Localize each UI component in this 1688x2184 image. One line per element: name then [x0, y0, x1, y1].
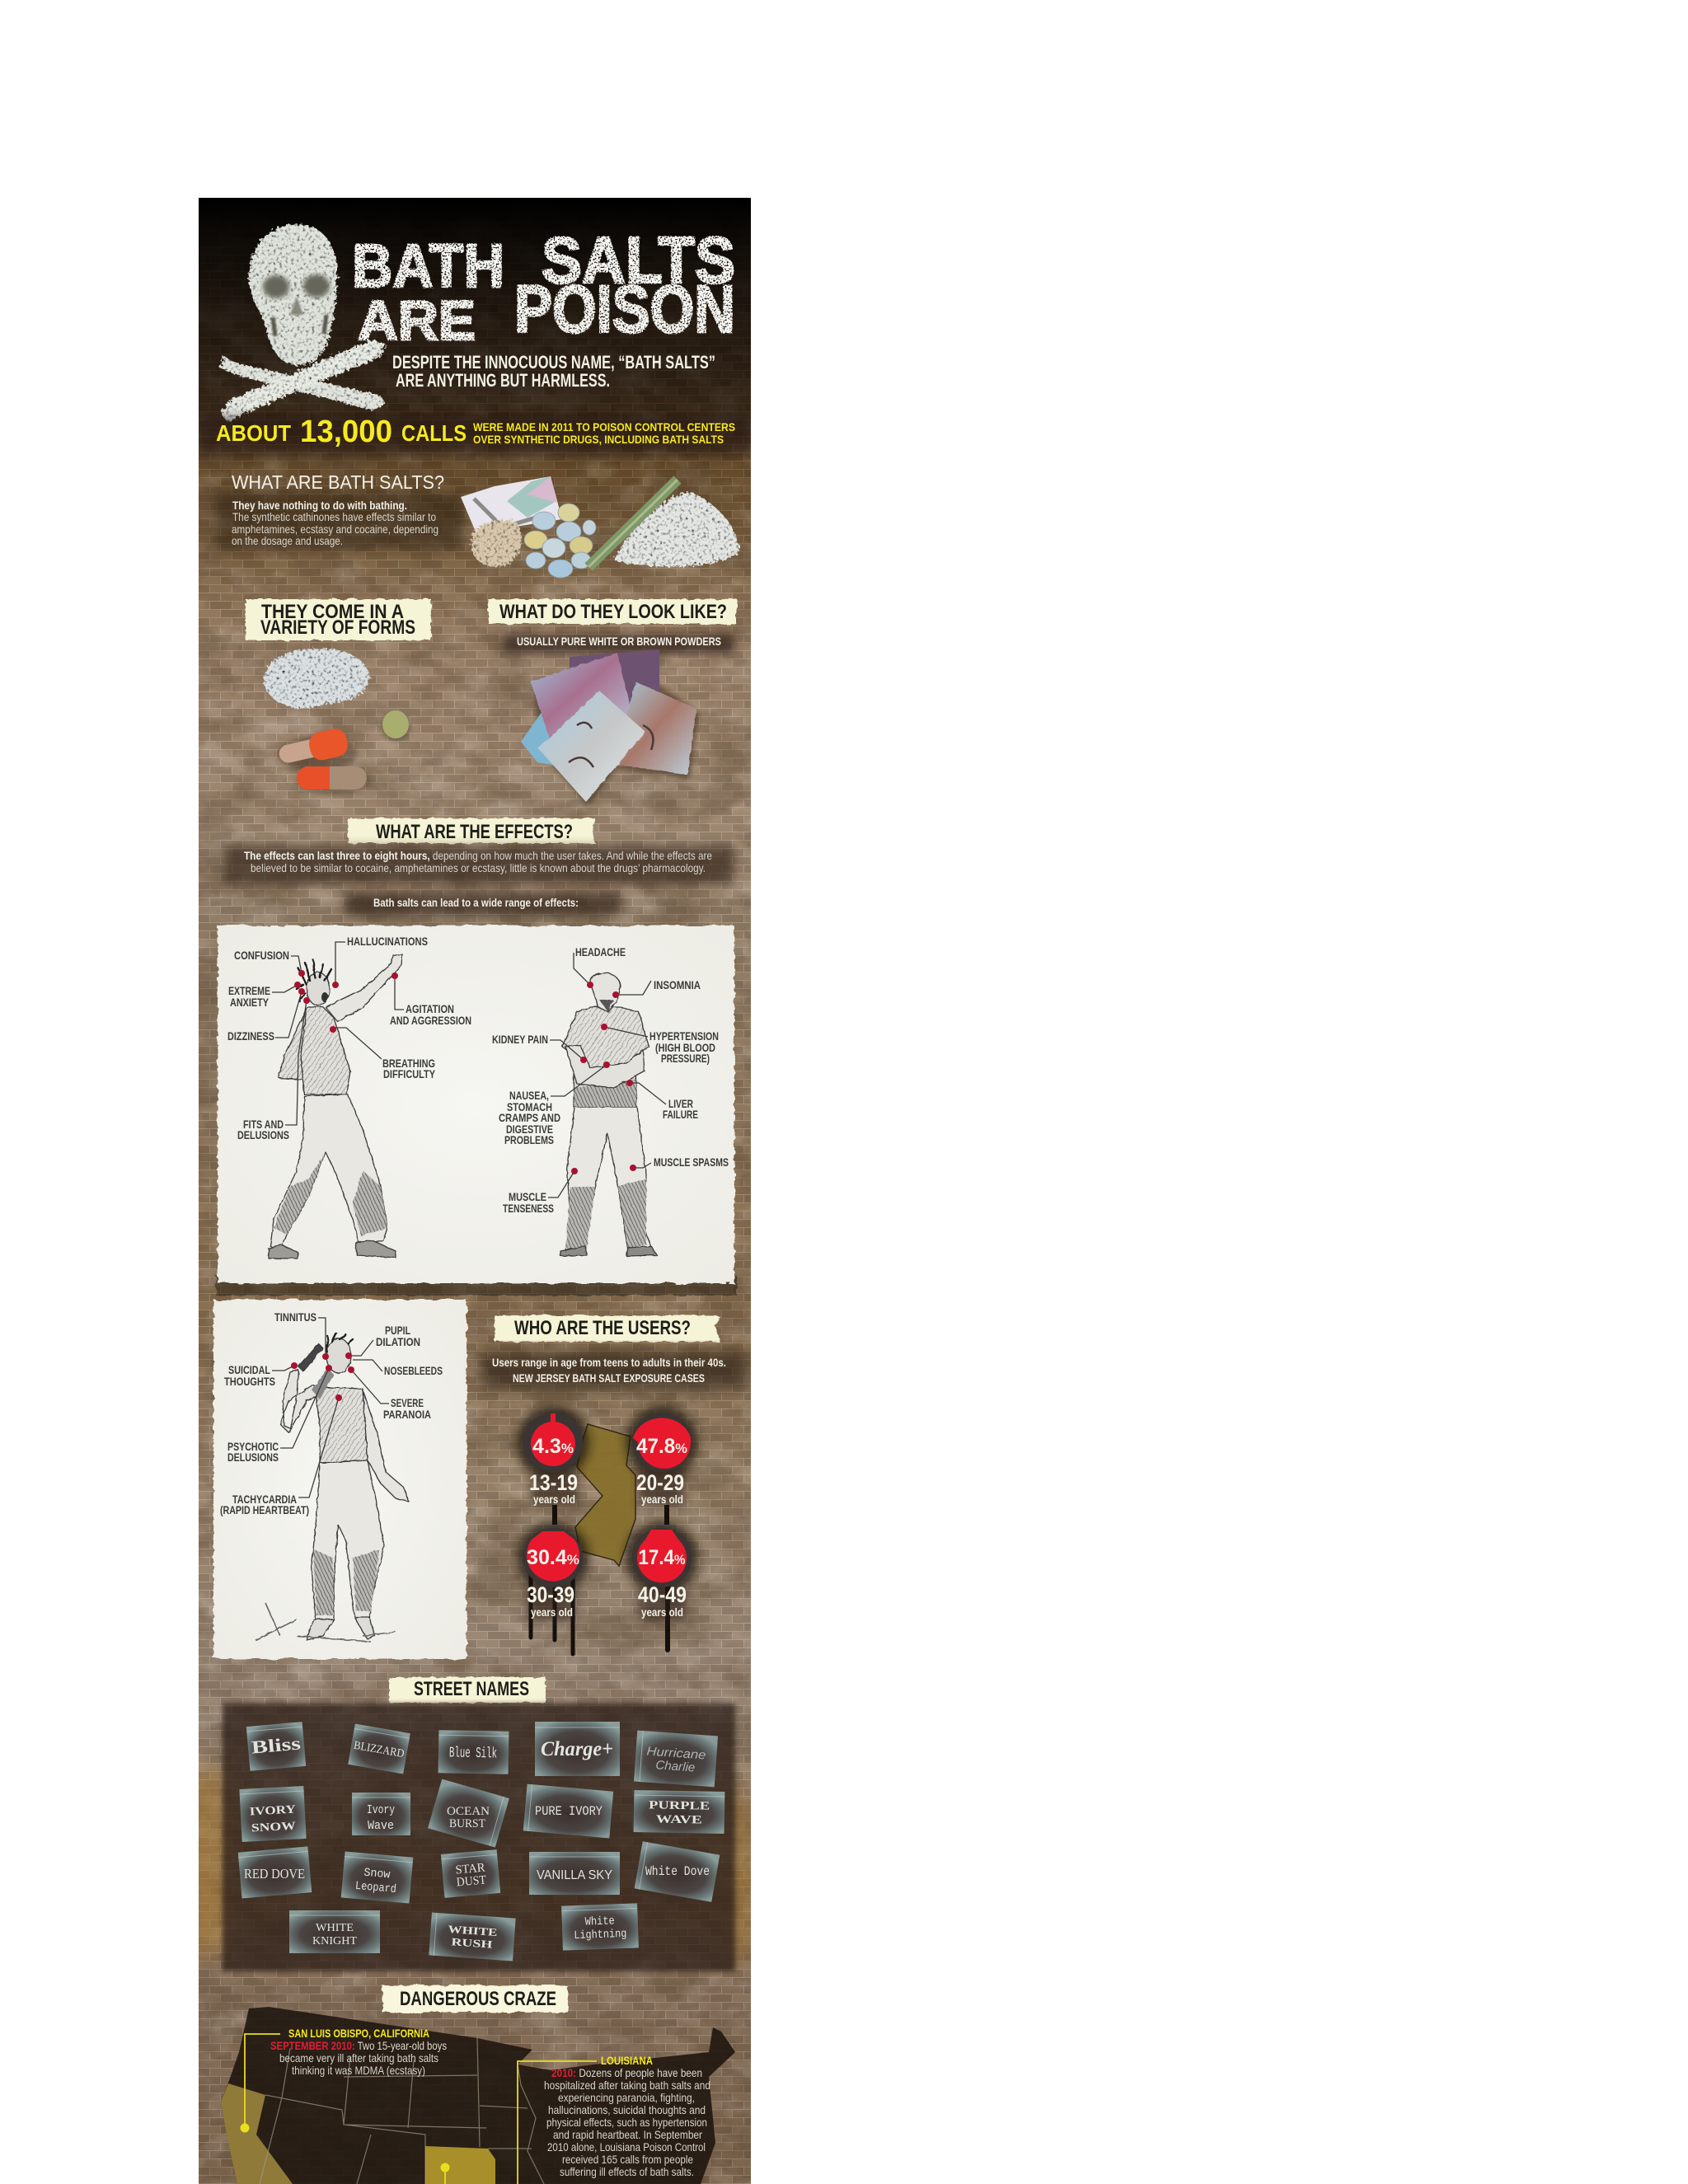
effect labels: third figure: (RAPID HEARTBEAT): [220, 1503, 309, 1516]
heading: street names: [389, 1677, 546, 1703]
effect labels: right figure: TENSENESS: [503, 1202, 554, 1215]
heading: dangerous craze: [382, 1985, 568, 2013]
bag: Ivory Snow: [239, 1786, 307, 1842]
callout: louisiana: suffering ill effects of bath salts.: [560, 2165, 694, 2178]
heading: what do they look like: WHAT DO THEY LOOK LIKE?: [499, 601, 727, 623]
effect labels: left figure: DIZZINESS: [227, 1029, 274, 1043]
heading: they come in a variety of forms: THEY COME IN A: [261, 601, 404, 623]
effect labels: right figure: PROBLEMS: [504, 1133, 554, 1146]
bag: Hurricane Charlie: Charlie: [655, 1758, 696, 1775]
effect labels: right figure: CRAMPS AND: [499, 1111, 560, 1124]
bag: Red Dove: [238, 1846, 312, 1899]
text block: what are bath salts: The synthetic cathinones have effects similar to: [232, 510, 436, 523]
text block: what are bath salts: [216, 471, 463, 550]
text block: what are bath salts: They have nothing to do with bathing.: [232, 499, 407, 512]
effect labels: left figure: BREATHING: [382, 1057, 435, 1070]
callout: san luis obispo: [241, 2027, 447, 2133]
bag: Ivory Wave: [352, 1793, 410, 1835]
icon: drugs, pills, note and powder: [461, 476, 739, 578]
effect labels: third figure: DELUSIONS: [227, 1451, 279, 1464]
bag: Blizzard: [348, 1723, 410, 1774]
effect labels: third figure: PSYCHOTIC: [227, 1440, 279, 1453]
callout: louisiana: hallucinations, suicidal thoughts and: [548, 2103, 706, 2116]
heading: they come in a variety of forms: [246, 599, 431, 640]
effect labels: left figure: DIFFICULTY: [383, 1067, 436, 1080]
icon: capsules: [276, 727, 371, 794]
brick wall background: [185, 198, 758, 2184]
icon: white crystal: [264, 649, 369, 708]
title: BATH: [352, 232, 504, 300]
effect labels: right figure: HEADACHE: [575, 945, 626, 958]
effect labels: right figure: [492, 945, 729, 1215]
callout: louisiana: 2010 alone, Louisiana Poison Control: [547, 2140, 706, 2154]
bag: Blue Silk: Blue Silk: [449, 1745, 497, 1763]
bag: Snow Leopard: Snow: [363, 1867, 392, 1882]
chart: age 40-49: 17.4%: [638, 1546, 686, 1569]
bag: Star Dust: DUST: [456, 1873, 487, 1890]
chart: age 20-29: 20-29: [636, 1470, 684, 1495]
text block: effects duration: believed to be similar to cocaine, amphetamines or ecstasy, little is known about the drugs’ pharmacology.: [251, 861, 706, 874]
panel: street names: [223, 1704, 735, 1971]
caption: wide range of effects: [345, 893, 621, 915]
bag: Bliss: Bliss: [251, 1732, 302, 1758]
bag: Charge+: [535, 1722, 620, 1776]
bag: Blizzard: BLIZZARD: [353, 1740, 406, 1760]
icon: green pill: [382, 710, 410, 741]
title: SALTS: [542, 223, 735, 297]
bag: Ivory Wave: Ivory: [367, 1803, 395, 1817]
text block: what are bath salts: WHAT ARE BATH SALTS?: [232, 471, 444, 493]
bag: White Lightning: Lightning: [574, 1928, 627, 1943]
effect labels: third figure: [220, 1310, 443, 1516]
bag: White Dove: [635, 1841, 720, 1902]
effect labels: left figure: [227, 935, 471, 1141]
callout: san luis obispo: thinking it was MDMA (ecstasy): [292, 2064, 425, 2077]
effect labels: left figure: DELUSIONS: [237, 1128, 289, 1141]
bag: Blue Silk: [438, 1730, 509, 1774]
chart: age 13-19: 4.3%: [532, 1435, 574, 1458]
effect labels: third figure: SUICIDAL: [228, 1363, 270, 1376]
bag: White Lightning: [561, 1903, 639, 1951]
icon: plastic bags of powder: [521, 649, 699, 806]
callout: louisiana: [518, 2054, 710, 2184]
callout: 13,000 calls: ABOUT: [216, 420, 291, 446]
bag: Bliss: [246, 1722, 306, 1771]
callout: 13,000 calls: OVER SYNTHETIC DRUGS, INCLUDING BATH SALTS: [473, 433, 724, 446]
icon: powder skull and crossbones: [219, 224, 386, 422]
callout: 13,000 calls: 13,000: [300, 415, 392, 449]
chart: age 13-19: 13-19: [529, 1470, 578, 1495]
callout: louisiana: 2010: Dozens of people have been: [551, 2066, 702, 2079]
caption: wide range of effects: Bath salts can lead to a wide range of effects:: [373, 896, 579, 909]
bag: Purple Wave: WAVE: [656, 1814, 702, 1826]
callout: san luis obispo: became very ill after taking bath salts: [279, 2051, 438, 2064]
text block: users: [480, 1352, 745, 1390]
callout: 13,000 calls: CALLS: [401, 420, 467, 446]
bag: Snow Leopard: Leopard: [354, 1880, 396, 1896]
effect labels: right figure: STOMACH: [507, 1100, 552, 1113]
effect labels: third figure: DILATION: [376, 1335, 420, 1348]
figure: man clutching stomach: [560, 973, 657, 1256]
heading: what are the effects: WHAT ARE THE EFFECTS?: [376, 821, 573, 843]
callout: san luis obispo: SEPTEMBER 2010: Two 15-year-old boys: [270, 2039, 447, 2052]
bag: Ivory Wave: Wave: [368, 1819, 394, 1833]
bag: Pure Ivory: [523, 1784, 613, 1839]
map: united states: [221, 2007, 735, 2184]
panel: paranoia paper: [213, 1300, 467, 1659]
callout: 13,000 calls: [199, 415, 751, 454]
bag label: Pure Ivory: PURE IVORY: [535, 1804, 603, 1819]
callout: louisiana: experiencing paranoia, fighting,: [558, 2091, 695, 2104]
bag: Ivory Snow: IVORY: [249, 1804, 296, 1818]
heading: street names: STREET NAMES: [414, 1678, 529, 1700]
effect labels: left figure: ANXIETY: [230, 996, 270, 1009]
effect labels: right figure: MUSCLE SPASMS: [654, 1155, 729, 1169]
effect labels: third figure: PARANOIA: [383, 1408, 431, 1421]
chart: age 40-49: years old: [641, 1605, 683, 1619]
heading: they come in a variety of forms: VARIETY OF FORMS: [260, 616, 415, 639]
effect labels: left figure: AGITATION: [406, 1002, 454, 1015]
effect labels: right figure: INSOMNIA: [654, 978, 701, 991]
bag: White Knight: [289, 1910, 380, 1953]
bag: White Rush: [429, 1913, 516, 1961]
effect labels: third figure: NOSEBLEEDS: [384, 1364, 443, 1377]
effect labels: right figure: KIDNEY PAIN: [492, 1033, 548, 1046]
infographic panel: [185, 198, 758, 2184]
bag label: Ocean Burst: BURST: [449, 1817, 485, 1830]
effect labels: third figure: SEVERE: [391, 1396, 424, 1409]
callout: louisiana: hospitalized after taking bath salts and: [544, 2079, 710, 2092]
bag: Charge+: Charge+: [541, 1738, 613, 1760]
bag label: White Dove: White Dove: [645, 1864, 710, 1879]
text block: effects duration: The effects can last three to eight hours, depending on how much the user takes. And while the effects are: [244, 849, 712, 862]
map marker: central state: [440, 2163, 450, 2184]
chart: age 20-29: 47.8%: [636, 1435, 687, 1458]
effect labels: right figure: PRESSURE): [661, 1052, 710, 1065]
bag: Purple Wave: [634, 1790, 724, 1834]
effect labels: third figure: THOUGHTS: [224, 1375, 275, 1388]
text block: what are bath salts: on the dosage and usage.: [232, 534, 343, 547]
panel: effects paper: [216, 926, 737, 1296]
icon: new jersey map: [575, 1424, 635, 1566]
bag: White Knight: KNIGHT: [312, 1935, 357, 1947]
bag: Snow Leopard: [341, 1852, 413, 1904]
bag: Star Dust: STAR: [455, 1861, 485, 1877]
title: ARE: [358, 289, 476, 352]
bag: White Lightning: White: [585, 1915, 615, 1929]
chart: age 20-29: years old: [641, 1493, 683, 1506]
effect labels: right figure: NAUSEA,: [509, 1089, 549, 1102]
bag: White Rush: RUSH: [451, 1935, 493, 1951]
callout: louisiana: and rapid heartbeat. In September: [553, 2128, 702, 2141]
subtitle: DESPITE THE INNOCUOUS NAME, “BATH SALTS”: [392, 352, 715, 373]
bag label: Red Dove: RED DOVE: [244, 1866, 305, 1882]
subtitle: [393, 356, 715, 387]
callout: 13,000 calls: WERE MADE IN 2011 TO POISON CONTROL CENTERS: [473, 420, 735, 434]
title: [354, 236, 734, 341]
effect labels: third figure: TINNITUS: [274, 1310, 316, 1324]
heading: dangerous craze: DANGEROUS CRAZE: [400, 1988, 556, 2010]
chart: age 20-29: [626, 1406, 698, 1525]
bag label: Ocean Burst: [447, 1805, 490, 1830]
effect labels: left figure: FITS AND: [243, 1118, 284, 1131]
effect labels: left figure: HALLUCINATIONS: [347, 935, 428, 948]
text block: what are bath salts: amphetamines, ecstasy and cocaine, depending: [232, 523, 438, 536]
caption: powders: [504, 635, 734, 653]
bag: Purple Wave: PURPLE: [649, 1799, 710, 1813]
bag label: Ocean Burst: OCEAN: [447, 1805, 490, 1818]
heading: who are the users: WHO ARE THE USERS?: [514, 1317, 691, 1339]
figure: man with raised arm: [269, 954, 402, 1258]
bag: Hurricane Charlie: [634, 1731, 718, 1787]
caption: powders: USUALLY PURE WHITE OR BROWN POWDERS: [517, 635, 721, 648]
effect labels: right figure: LIVER: [668, 1097, 693, 1110]
text block: effects duration: [224, 846, 734, 883]
chart: age 13-19: [517, 1406, 589, 1506]
effect labels: right figure: FAILURE: [663, 1108, 698, 1121]
bag: Hurricane Charlie: Hurricane: [646, 1745, 706, 1763]
chart: age 13-19: years old: [533, 1493, 575, 1506]
bag: Ocean Burst: [428, 1779, 509, 1848]
effect labels: left figure: AND AGGRESSION: [390, 1014, 471, 1027]
effect labels: third figure: TACHYCARDIA: [232, 1493, 297, 1506]
subtitle: ARE ANYTHING BUT HARMLESS.: [396, 370, 610, 391]
effect labels: right figure: HYPERTENSION: [649, 1029, 719, 1043]
chart: age 30-39: years old: [531, 1605, 573, 1619]
bag: Vanilla Sky: [529, 1852, 620, 1895]
bag: Vanilla Sky: VANILLA SKY: [537, 1868, 612, 1882]
chart: age 40-49: [626, 1521, 698, 1650]
title: POISON: [514, 272, 735, 347]
figure: man with gun to head: [256, 1333, 409, 1642]
text block: users: Users range in age from teens to adults in their 40s.: [492, 1356, 726, 1369]
chart: age 40-49: 40-49: [638, 1582, 687, 1607]
bag: Star Dust: [441, 1849, 500, 1898]
chart: age 30-39: 30.4%: [527, 1546, 579, 1569]
bag: Ivory Snow: SNOW: [251, 1821, 296, 1835]
callout: louisiana: LOUISIANA: [601, 2054, 653, 2067]
bag: White Rush: WHITE: [448, 1923, 498, 1938]
chart: age 30-39: [517, 1505, 589, 1654]
effect labels: left figure: CONFUSION: [234, 949, 289, 962]
effect labels: right figure: MUSCLE: [509, 1190, 546, 1203]
callout: san luis obispo: SAN LUIS OBISPO, CALIFORNIA: [288, 2027, 429, 2040]
effect labels: right figure: (HIGH BLOOD: [655, 1041, 715, 1054]
callout: louisiana: received 165 calls from people: [562, 2153, 693, 2166]
effect labels: left figure: EXTREME: [228, 984, 270, 997]
callout: louisiana: physical effects, such as hypertension: [546, 2116, 707, 2129]
chart: age 30-39: 30-39: [527, 1582, 574, 1607]
effect labels: third figure: PUPIL: [385, 1324, 410, 1337]
text block: users: NEW JERSEY BATH SALT EXPOSURE CASES: [513, 1371, 705, 1385]
bag: White Knight: WHITE: [316, 1922, 354, 1934]
effect labels: right figure: DIGESTIVE: [506, 1122, 553, 1136]
